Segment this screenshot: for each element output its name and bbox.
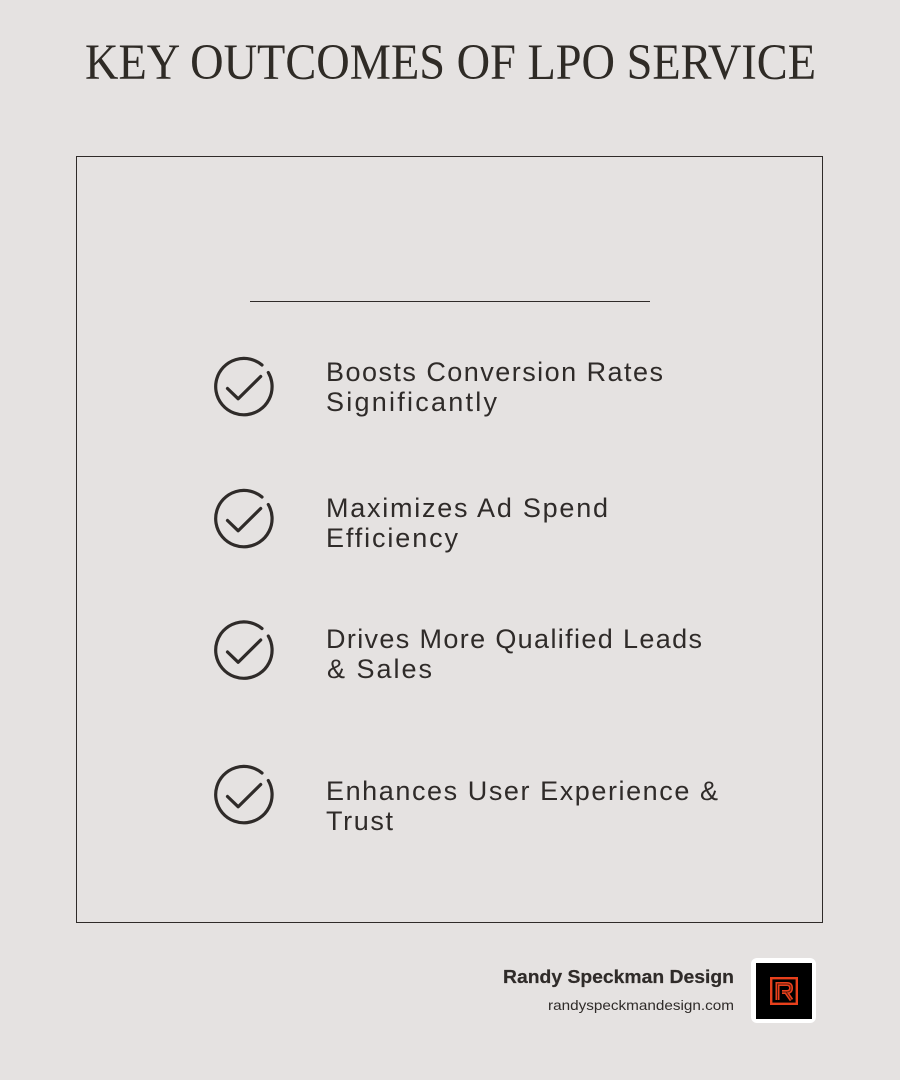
outcome text 1 (326, 357, 663, 417)
footer brand name: Randy Speckman Design (503, 966, 734, 987)
title: KEY OUTCOMES OF LPO SERVICE (85, 35, 816, 91)
outcome text 3: & Sales (327, 654, 432, 684)
panel: outcomes frame (76, 156, 822, 922)
outcome text 4 (326, 776, 718, 836)
icon: logo badge (751, 958, 816, 1023)
outcome text 2 (326, 493, 608, 553)
icon: check circle 1 (216, 358, 272, 415)
outcome text 1: Significantly (326, 387, 498, 417)
outcome text 4: Enhances User Experience & (326, 776, 718, 806)
outcome text 3 (326, 624, 702, 684)
outcome text 1: Boosts Conversion Rates (326, 357, 663, 387)
outcome text 3: Drives More Qualified Leads (326, 624, 702, 654)
icon: check circle 4 (216, 766, 272, 823)
outcome text 2: Maximizes Ad Spend (326, 493, 608, 523)
icon: check circle 3 (216, 622, 272, 678)
outcome text 4: Trust (326, 806, 393, 836)
outcome text 2: Efficiency (326, 523, 458, 553)
icon: check circle 2 (216, 490, 272, 547)
footer website: randyspeckmandesign.com (548, 997, 734, 1013)
